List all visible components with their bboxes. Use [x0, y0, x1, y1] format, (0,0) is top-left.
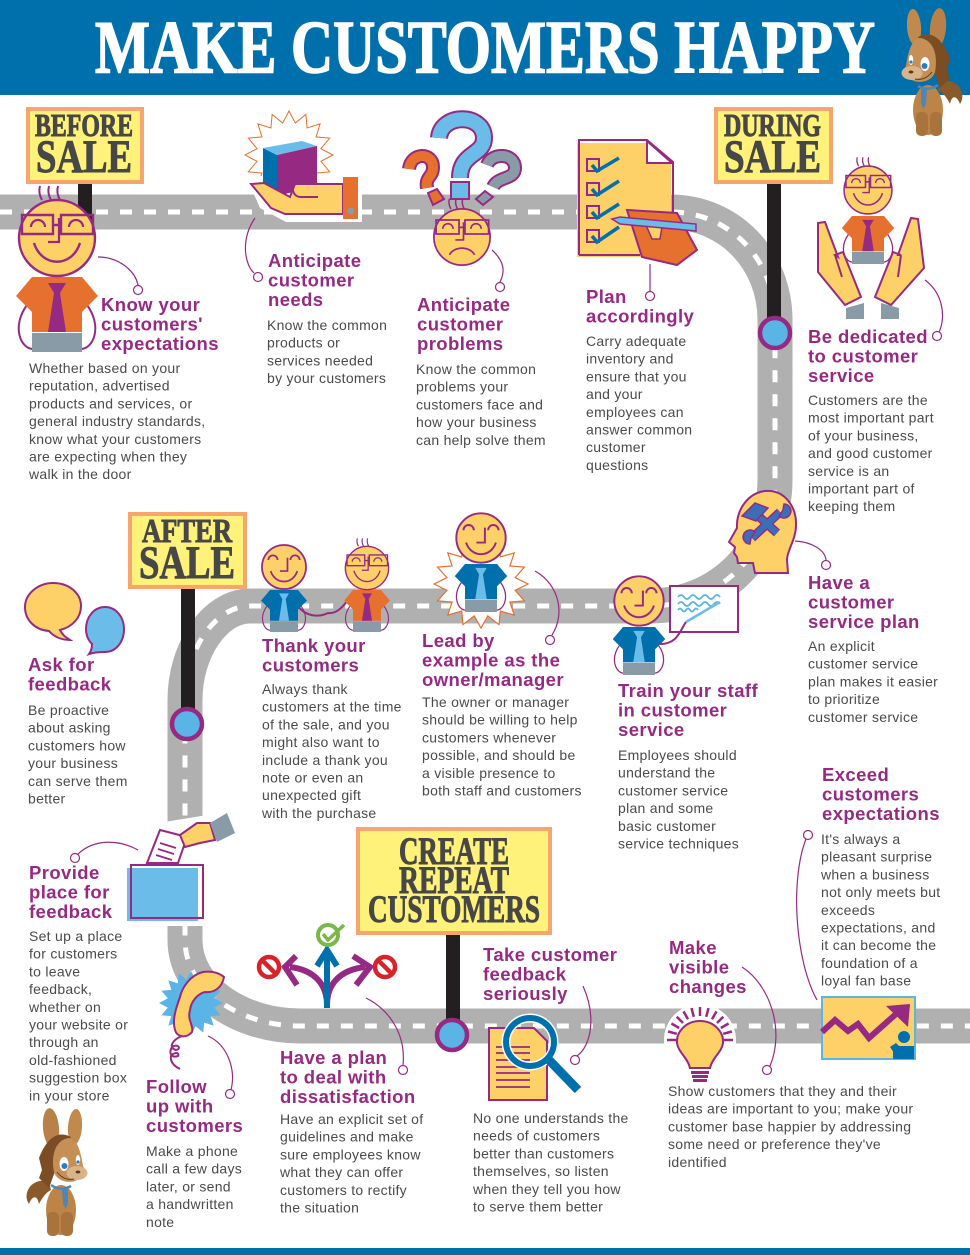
step: be dedicated to customer service: and good customer [808, 445, 933, 461]
step: train your staff: service techniques [618, 836, 739, 852]
step: anticipate customer problems: customers face and [416, 396, 543, 412]
icon: handshake of two people [261, 538, 390, 632]
step: make visible changes: visible [669, 957, 729, 978]
step: anticipate customer needs: Anticipate [268, 250, 361, 271]
step: plan accordingly: inventory and [586, 351, 674, 367]
sign: before sale [28, 107, 142, 234]
step: train your staff [618, 680, 758, 852]
step: take customer feedback seriously: seriously [483, 983, 568, 1004]
step: thank your customers: unexpected gift [262, 787, 361, 803]
step: be dedicated to customer service: keeping them [808, 498, 895, 514]
step: be dedicated to customer service: to customer [808, 346, 918, 367]
step: provide place for feedback: feedback [29, 901, 113, 922]
step: know your customers' expectations: reputation, advertised [29, 378, 170, 394]
step: train your staff: customer service [618, 782, 728, 798]
connector: be dedicated [925, 280, 942, 340]
step: train your staff: Employees should [618, 747, 737, 763]
step: have a customer service plan: Have a [808, 572, 870, 593]
connector: anticipate problems [492, 250, 504, 292]
step: be dedicated to customer service: Customers are the [808, 392, 928, 408]
icon: rising chart [822, 997, 915, 1059]
step: have a customer service plan: customer service [808, 709, 918, 725]
step: have a plan to deal with dissatisfaction: what they can offer [279, 1164, 403, 1180]
footer bar [0, 1248, 970, 1255]
step: lead by example: The owner or manager [422, 694, 569, 710]
step: thank your customers: Always thank [262, 681, 349, 697]
sign: create repeat customers: REPEAT [399, 859, 509, 902]
step: have a customer service plan: customer [808, 592, 894, 613]
step: follow up with customers: note [146, 1214, 174, 1230]
step: plan accordingly: and your [586, 386, 643, 402]
step: lead by example: customers whenever [422, 729, 556, 745]
step: anticipate customer needs: products or [267, 335, 340, 351]
step: ask for feedback: better [28, 790, 66, 806]
step: provide place for feedback: suggestion box [29, 1070, 127, 1086]
step: ask for feedback: your business [28, 755, 118, 771]
step: provide place for feedback: place for [29, 882, 110, 903]
icon: light bulb [664, 1004, 736, 1084]
step: plan accordingly: Plan [586, 286, 627, 307]
step: anticipate customer problems: problems your [416, 379, 508, 395]
step: anticipate customer needs: by your customers [267, 370, 386, 386]
icon: trainer at whiteboard [613, 576, 738, 675]
step: thank your customers: with the purchase [261, 805, 376, 821]
step: make visible changes: ideas are important to you; make your [668, 1101, 913, 1117]
step: thank your customers [261, 635, 402, 821]
step: take customer feedback seriously [472, 944, 629, 1214]
icon: speech bubbles [25, 583, 124, 654]
step: ask for feedback: customers how [28, 737, 126, 753]
step: make visible changes: identified [668, 1154, 727, 1170]
connector: plan accordingly [646, 264, 654, 300]
step: anticipate customer problems: can help solve them [416, 432, 546, 448]
header banner [0, 0, 970, 95]
step: take customer feedback seriously: themselves, so listen [473, 1163, 609, 1179]
step: make visible changes: Make [669, 937, 717, 958]
step: exceed customers expectations: when a business [820, 866, 930, 882]
sign: before sale: SALE [36, 131, 132, 183]
step: ask for feedback: feedback [28, 674, 112, 695]
connector: provide place [70, 842, 138, 862]
step: have a plan to deal with dissatisfaction: guidelines and make [280, 1129, 414, 1145]
step: provide place for feedback: to leave [29, 963, 80, 979]
step: plan accordingly: answer common [586, 422, 692, 438]
step: train your staff: understand the [618, 765, 715, 781]
step: know your customers' expectations: general industry standards, [29, 413, 205, 429]
step: exceed customers expectations: expectations, and [821, 920, 936, 936]
connector: anticipate needs [245, 218, 262, 282]
step: know your customers' expectations: Know your [101, 294, 200, 315]
icon: document with magnifier [489, 1018, 578, 1100]
icon: worried customer [434, 199, 490, 265]
step: lead by example: both staff and customers [422, 782, 582, 798]
icon: suggestion box [118, 810, 238, 926]
step: lead by example: should be willing to help [422, 712, 578, 728]
step: take customer feedback seriously: to serve them better [473, 1198, 603, 1214]
step: be dedicated to customer service: most important part [808, 410, 934, 426]
step: have a customer service plan [808, 572, 938, 725]
step: plan accordingly: customer [586, 439, 646, 455]
step: lead by example: possible, and should be [422, 747, 576, 763]
icon: head with crossed tools [729, 491, 796, 573]
step: thank your customers: of the sale, and you [262, 716, 390, 732]
step: have a customer service plan: An explicit [808, 638, 875, 654]
sign: create repeat customers [358, 829, 550, 1050]
step: anticipate customer needs: needs [268, 289, 323, 310]
step: provide place for feedback: Provide [29, 862, 100, 883]
sign: after sale [130, 513, 245, 739]
connector: take feedback [570, 986, 591, 1064]
step: provide place for feedback: for customers [29, 946, 117, 962]
step: lead by example: a visible presence to [422, 765, 556, 781]
step: provide place for feedback: in your store [29, 1087, 110, 1103]
step: ask for feedback: about asking [28, 720, 111, 736]
step: know your customers' expectations: customers' [101, 314, 203, 335]
step: thank your customers: Thank your [262, 635, 366, 656]
icon: telephone with burst [159, 971, 224, 1069]
step: take customer feedback seriously: better than customers [473, 1145, 614, 1161]
step: train your staff: basic customer [618, 818, 716, 834]
step: thank your customers: customers [262, 655, 359, 676]
step: take customer feedback seriously: feedback [483, 964, 567, 985]
step: provide place for feedback: Set up a place [29, 928, 122, 944]
step: lead by example: Lead by [422, 630, 495, 651]
step: exceed customers expectations: foundation of a [821, 955, 918, 971]
icon: branching arrows [259, 925, 395, 1008]
step: have a customer service plan: customer service [808, 656, 918, 672]
step: know your customers' expectations [28, 294, 219, 482]
sign: create repeat customers: CREATE [399, 830, 509, 873]
step: anticipate customer needs: customer [268, 270, 354, 291]
winding road [0, 212, 970, 1026]
step: anticipate customer problems: problems [417, 333, 503, 354]
step: anticipate customer needs: Know the common [267, 317, 387, 333]
connector: know your customers [98, 257, 142, 294]
step: know your customers' expectations: are expecting when they [29, 448, 187, 464]
step: have a customer service plan: plan makes it easier [808, 673, 938, 689]
step: train your staff: in customer [618, 700, 727, 721]
step: have a customer service plan: to prioritize [808, 691, 880, 707]
step: know your customers' expectations: products and services, or [29, 395, 192, 411]
step: train your staff: plan and some [618, 800, 713, 816]
step: exceed customers expectations: expectations [822, 803, 940, 824]
step: anticipate customer problems: Know the common [416, 361, 536, 377]
step: anticipate customer problems: how your business [416, 414, 537, 430]
sign: during sale: DURING [724, 107, 821, 143]
step: make visible changes: Show customers that they and their [668, 1083, 897, 1099]
sign: during sale [716, 107, 831, 348]
step: follow up with customers: a handwritten [146, 1196, 234, 1212]
step: anticipate customer problems: Anticipate [417, 294, 510, 315]
step: have a plan to deal with dissatisfaction: Have a plan [280, 1047, 387, 1068]
step: know your customers' expectations: know what your customers [29, 431, 201, 447]
step: thank your customers: note or even an [262, 770, 364, 786]
step: train your staff: Train your staff [618, 680, 758, 701]
sign: after sale: SALE [139, 537, 235, 589]
step: have a plan to deal with dissatisfaction: Have an explicit set of [280, 1111, 423, 1127]
step: provide place for feedback: whether on [28, 999, 101, 1015]
connector: lead by example [535, 571, 559, 644]
sign: during sale: SALE [724, 131, 821, 183]
step: ask for feedback: Be proactive [28, 702, 109, 718]
connector: service plan [795, 541, 830, 570]
step: plan accordingly: Carry adequate [586, 333, 686, 349]
step: provide place for feedback [28, 862, 128, 1103]
step: provide place for feedback: through an [29, 1034, 99, 1050]
step: provide place for feedback: your website or [29, 1016, 128, 1032]
connector: exceed expectations [797, 830, 817, 1000]
sign: before sale: BEFORE [35, 107, 133, 143]
icon: checklist with hand and pen [577, 140, 697, 265]
step: be dedicated to customer service: Be dedicated [808, 326, 928, 347]
step: be dedicated to customer service [808, 326, 934, 514]
step: exceed customers expectations: customers [822, 784, 919, 805]
step: know your customers' expectations: walk in the door [28, 466, 132, 482]
step: thank your customers: customers at the time [262, 699, 402, 715]
step: provide place for feedback: old-fashioned [29, 1052, 117, 1068]
step: make visible changes: changes [669, 976, 747, 997]
step: thank your customers: might also want to [262, 734, 380, 750]
step: ask for feedback: can serve them [28, 773, 128, 789]
step: take customer feedback seriously: needs of customers [473, 1128, 600, 1144]
step: make visible changes: some need or preference they've [668, 1136, 881, 1152]
step: exceed customers expectations: it can become the [821, 937, 936, 953]
step: have a plan to deal with dissatisfaction: dissatisfaction [280, 1086, 416, 1107]
step: have a plan to deal with dissatisfaction: the situation [280, 1200, 359, 1216]
step: plan accordingly: accordingly [586, 306, 695, 327]
step: have a plan to deal with dissatisfaction [279, 1047, 423, 1216]
step: lead by example: owner/manager [422, 669, 564, 690]
connector: follow up [208, 1036, 234, 1098]
step: train your staff: service [618, 719, 685, 740]
icon: leader with burst [434, 513, 528, 628]
step: ask for feedback [28, 654, 128, 806]
step: exceed customers expectations: not only meets but [821, 884, 940, 900]
step: anticipate customer problems: customer [417, 314, 503, 335]
step: exceed customers expectations: loyal fan base [821, 973, 911, 989]
step: anticipate customer needs [267, 250, 387, 386]
step: follow up with customers: customers [146, 1115, 243, 1136]
step: lead by example [422, 630, 582, 798]
step: exceed customers expectations [820, 764, 940, 989]
sign: create repeat customers: CUSTOMERS [368, 888, 540, 931]
step: have a customer service plan: service plan [808, 611, 920, 632]
step: exceed customers expectations: Exceed [822, 764, 889, 785]
connector: visible changes [742, 967, 776, 1074]
step: take customer feedback seriously: when they tell you how [472, 1181, 621, 1197]
step: be dedicated to customer service: service [808, 365, 875, 386]
sign: after sale: AFTER [142, 513, 232, 550]
step: follow up with customers: Follow [146, 1076, 207, 1097]
step: anticipate customer problems [416, 294, 546, 448]
step: be dedicated to customer service: service is an [808, 463, 889, 479]
step: have a plan to deal with dissatisfaction: to deal with [280, 1067, 387, 1088]
step: make visible changes: customer base happier by addressing [668, 1118, 911, 1134]
connector: have a plan [366, 998, 408, 1074]
step: be dedicated to customer service: important part of [808, 480, 915, 496]
icon: donkey mascot top [902, 7, 962, 136]
icon: customer between protective hands [818, 157, 924, 319]
step: have a plan to deal with dissatisfaction: customers to rectify [280, 1182, 407, 1198]
step: follow up with customers: later, or send [146, 1178, 231, 1194]
icon: donkey mascot bottom [27, 1107, 88, 1236]
step: ask for feedback: Ask for [28, 654, 95, 675]
step: thank your customers: include a thank you [262, 752, 388, 768]
step: plan accordingly: questions [586, 457, 648, 473]
step: exceed customers expectations: exceeds [821, 902, 875, 918]
step: take customer feedback seriously: Take customer [483, 944, 617, 965]
step: anticipate customer needs: services needed [267, 352, 373, 368]
step: plan accordingly: ensure that you [586, 368, 687, 384]
step: follow up with customers: up with [146, 1096, 214, 1117]
step: follow up with customers: call a few days [146, 1161, 242, 1177]
step: follow up with customers [146, 1076, 243, 1230]
step: know your customers' expectations: expectations [101, 333, 219, 354]
step: have a plan to deal with dissatisfaction: sure employees know [280, 1146, 421, 1162]
step: know your customers' expectations: Whether based on your [29, 360, 180, 376]
step: lead by example: example as the [422, 650, 560, 671]
step: provide place for feedback: feedback, [29, 981, 92, 997]
step: make visible changes [668, 937, 913, 1170]
step: plan accordingly [586, 286, 695, 473]
icon: happy customer with glasses [16, 186, 98, 352]
step: exceed customers expectations: It's always a [821, 831, 900, 847]
icon: question marks [409, 119, 515, 205]
step: plan accordingly: employees can [586, 404, 684, 420]
step: be dedicated to customer service: of your business, [808, 427, 919, 443]
step: follow up with customers: Make a phone [146, 1143, 238, 1159]
icon: box in hand [245, 111, 362, 222]
step: take customer feedback seriously: No one understands the [473, 1110, 629, 1126]
step: exceed customers expectations: pleasant surprise [821, 849, 932, 865]
